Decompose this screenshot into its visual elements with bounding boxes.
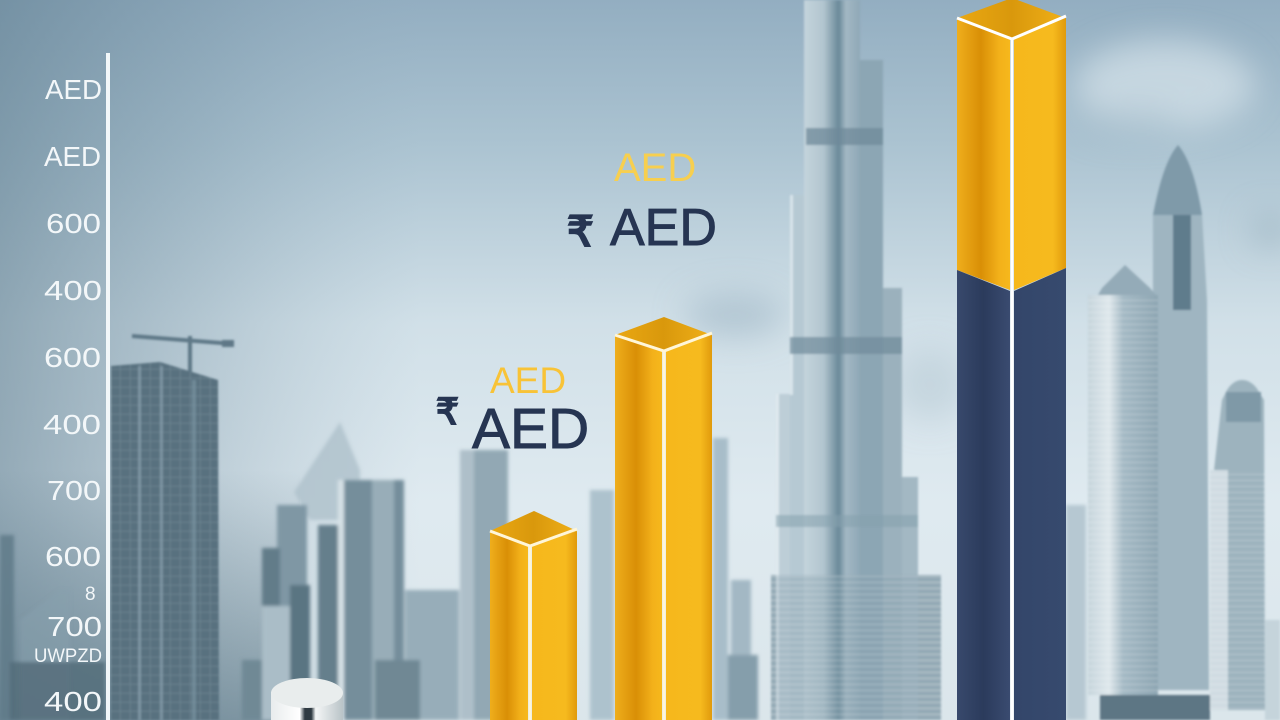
axis labels: 8	[85, 584, 96, 605]
label: upper gold AED: AED	[614, 146, 696, 190]
far skyline: background towers	[0, 422, 1086, 720]
axis labels: 400	[44, 686, 102, 717]
label: lower navy AED with currency mark: ₹	[436, 391, 459, 432]
axis labels: 400	[43, 409, 101, 440]
axis labels: 400	[44, 275, 102, 306]
label: upper navy AED with currency mark: AED	[610, 199, 717, 257]
axis labels: 600	[44, 342, 101, 373]
axis labels: AED	[45, 74, 102, 105]
clouds	[685, 40, 1280, 421]
building: Burj Khalifa style spire	[771, 0, 941, 720]
axis labels: 700	[47, 611, 102, 642]
axis labels: AED	[44, 141, 101, 172]
label: lower gold AED: AED	[490, 360, 566, 401]
axis labels: 600	[46, 208, 101, 239]
axis labels	[34, 74, 102, 717]
building: twin towers right	[1088, 145, 1280, 720]
label: lower navy AED with currency mark: AED	[472, 397, 589, 461]
building: construction tower with crane	[111, 336, 234, 720]
icon: silver cylinder	[271, 678, 343, 720]
bar: medium gold	[615, 317, 712, 720]
label: lower navy AED with currency mark	[436, 391, 589, 461]
axis labels: 700	[47, 475, 101, 506]
axis labels: UWPZD	[34, 646, 102, 667]
bar: small gold	[490, 511, 577, 720]
bar: tall gold and navy	[957, 0, 1066, 720]
axis line	[106, 53, 110, 720]
label: upper navy AED with currency mark: ₹	[567, 208, 594, 255]
axis labels: 600	[45, 541, 101, 572]
